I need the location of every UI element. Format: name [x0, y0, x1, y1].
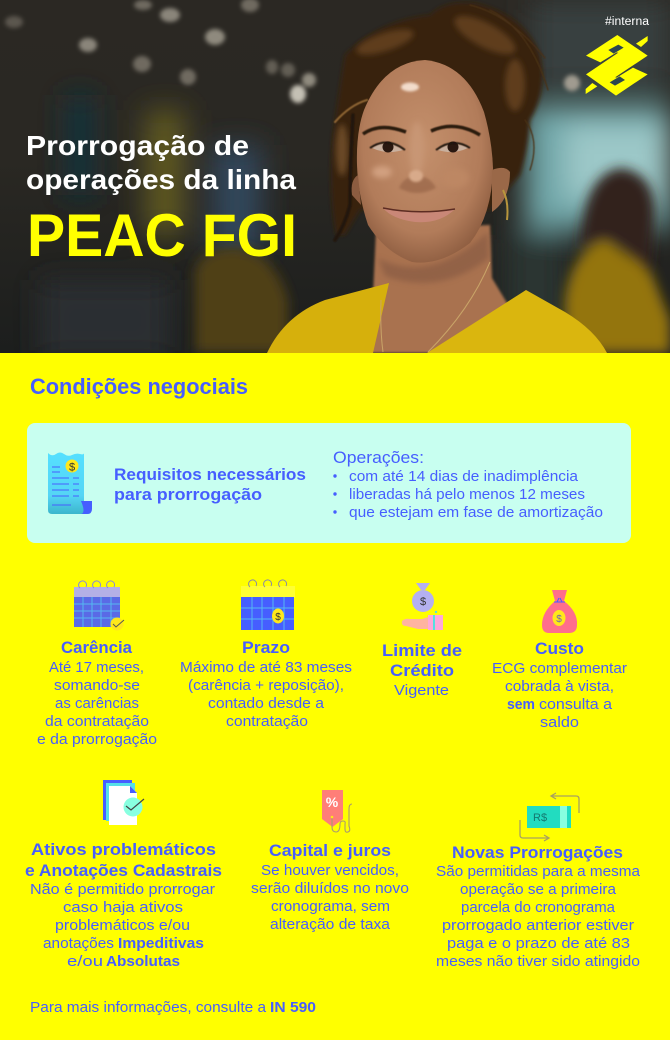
Capital e juros text [251, 841, 409, 933]
woman hair highlights [336, 8, 525, 176]
Ativos text: caso haja ativos [63, 899, 183, 916]
hero title [26, 130, 297, 269]
Custo text [492, 639, 627, 731]
Carência text: e da prorrogação [37, 731, 157, 748]
face [357, 60, 493, 263]
neck and chest [372, 223, 508, 353]
icon: banknote with arrows [520, 793, 579, 841]
Carência text [37, 638, 157, 748]
Novas Prorrogações text: São permitidas para a mesma [436, 863, 641, 880]
panel: requisitos [27, 423, 631, 543]
Capital e juros text: Se houver vencidos, [261, 862, 399, 879]
item: Ativos problemáticos [25, 780, 222, 970]
Capital e juros text: serão diluídos no novo [251, 880, 409, 897]
Ativos text: Impeditivas [118, 935, 204, 952]
icon: calendar with coin: $ [275, 612, 281, 623]
item: Prazo [180, 580, 352, 730]
Limite de Crédito text: Crédito [390, 661, 454, 680]
footer note: Para mais informações, consulte a [30, 999, 267, 1016]
Custo text: sem [507, 696, 535, 713]
item: Custo [492, 590, 627, 731]
Ativos text: anotações [43, 935, 114, 952]
Ativos text: e Anotações Cadastrais [25, 861, 222, 880]
Prazo text: Máximo de até 83 meses [180, 659, 352, 676]
icon: percent tag [322, 790, 352, 832]
Custo text: saldo [540, 714, 579, 731]
icon: percent tag: % [326, 794, 339, 810]
Ativos text: Não é permitido prorrogar [30, 881, 215, 898]
Capital e juros text: alteração de taxa [270, 916, 391, 933]
logo: Banco do Brasil mark [586, 35, 648, 96]
icon: receipt [48, 452, 92, 514]
Novas Prorrogações text: Novas Prorrogações [452, 843, 623, 862]
Prazo text: contado desde a [208, 695, 325, 712]
icon: pink money bag [542, 590, 577, 633]
requisitos text [114, 465, 306, 504]
hero title: operações da linha [26, 164, 296, 195]
nose [399, 176, 436, 193]
item: Limite de Crédito [382, 583, 462, 699]
icon: banknote with arrows: R$ [533, 812, 547, 824]
background people [195, 168, 670, 353]
icon: money bag over hand: $ [420, 596, 426, 608]
operações list [333, 448, 603, 521]
Limite de Crédito text: Limite de [382, 641, 462, 660]
Novas Prorrogações text: meses não tiver sido atingido [436, 953, 640, 970]
icon: calendar with check [74, 581, 124, 630]
Custo text: cobrada à vista, [505, 678, 614, 695]
necklace [381, 262, 490, 352]
operações list: Operações: [333, 448, 424, 467]
Prazo text: (carência + reposição), [188, 677, 344, 694]
blouse [267, 283, 389, 353]
Novas Prorrogações text: parcela do cronograma [461, 899, 616, 916]
Ativos text: Absolutas [106, 953, 180, 970]
footer note: IN 590 [270, 999, 316, 1016]
smile [383, 208, 455, 222]
Carência text: da contratação [45, 713, 149, 730]
operações list: que estejam em fase de amortização [349, 504, 603, 521]
Ativos text: e/ou [67, 953, 103, 970]
requisitos text: Requisitos necessários [114, 465, 306, 484]
Capital e juros text: Capital e juros [269, 841, 391, 860]
Custo text: ECG complementar [492, 660, 627, 677]
Custo text: Custo [535, 639, 584, 658]
item: Capital e juros [251, 790, 409, 933]
tag: #interna: #interna [605, 16, 650, 28]
icon: documents with check [103, 780, 144, 825]
Prazo text: contratação [226, 713, 308, 730]
Ativos text [25, 840, 222, 970]
eyebrows [363, 127, 406, 134]
Capital e juros text: cronograma, sem [271, 898, 390, 915]
requisitos text: para prorrogação [114, 485, 262, 504]
item: Novas Prorrogações [436, 793, 641, 970]
forehead and cheek highlights [401, 82, 419, 92]
operações list: com até 14 dias de inadimplência [349, 468, 579, 485]
eyes [372, 143, 403, 152]
Carência text: Até 17 meses, [49, 659, 144, 676]
Carência text: somando-se [54, 677, 140, 694]
hero title: Prorrogação de [26, 130, 249, 161]
hero title: PEAC FGI [27, 202, 297, 269]
section heading: Condições negociais [30, 374, 248, 399]
icon: pink money bag: $ [556, 614, 562, 625]
Novas Prorrogações text: paga e o prazo de até 83 [447, 935, 630, 952]
Ativos text: problemáticos e/ou [55, 917, 190, 934]
Novas Prorrogações text: prorrogado anterior estiver [442, 917, 634, 934]
Ativos text: Ativos problemáticos [31, 840, 216, 859]
woman hair mass [331, 2, 542, 235]
icon: receipt: $ [69, 462, 75, 474]
Carência text: as carências [55, 695, 139, 712]
Limite de Crédito text [382, 641, 462, 699]
Novas Prorrogações text: operação se a primeira [460, 881, 617, 898]
Prazo text: Prazo [242, 638, 290, 657]
Carência text: Carência [61, 638, 133, 657]
earring [503, 190, 508, 220]
hero photo: smiling woman in yellow blouse [0, 0, 670, 360]
Custo text: consulta a [539, 696, 613, 713]
Novas Prorrogações text [436, 843, 641, 970]
Limite de Crédito text: Vigente [394, 682, 449, 699]
woman hair strands [335, 5, 548, 240]
Prazo text [180, 638, 352, 730]
item: Carência [37, 581, 157, 748]
operações list: liberadas há pelo menos 12 meses [349, 486, 585, 503]
icon: calendar with coin [241, 580, 295, 630]
